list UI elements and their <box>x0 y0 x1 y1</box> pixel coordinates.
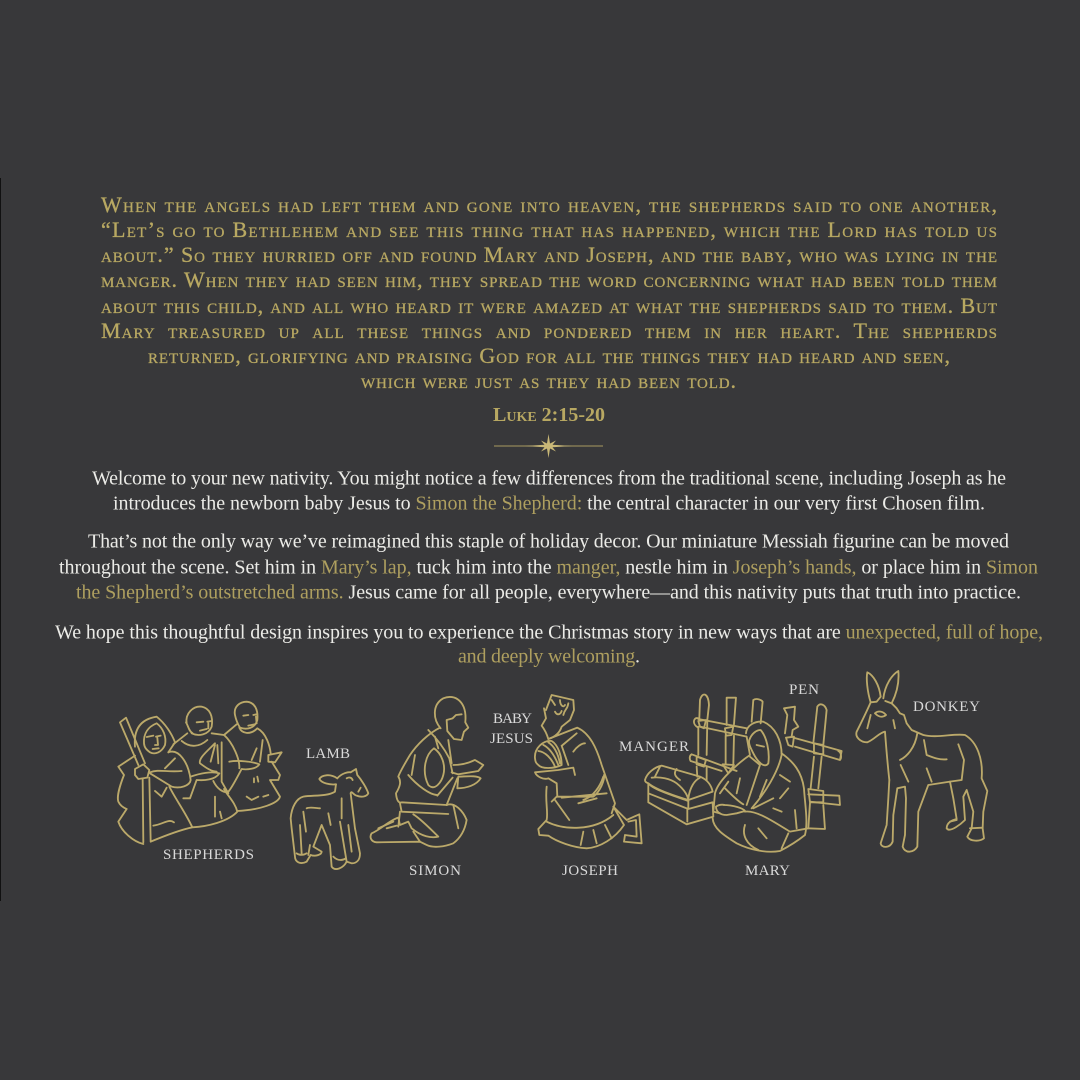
label: lamb: LAMB <box>306 746 350 762</box>
intro paragraph: Welcome to your new nativity. You might notice a few differences from the traditional scene, including Joseph as he <box>92 468 1006 490</box>
intro paragraph: introduces the newborn baby Jesus to Simon the Shepherd: the central character in our very first Chosen film. <box>113 492 985 514</box>
figurine paragraph: That’s not the only way we’ve reimagined this staple of holiday decor. Our miniature Messiah figurine can be moved <box>88 530 1009 552</box>
figure: Joseph <box>535 695 642 848</box>
scripture passage: which were just as they had been told. <box>361 368 736 393</box>
label: shepherds: SHEPHERDS <box>163 847 254 863</box>
figurine paragraph: throughout the scene. Set him in Mary’s lap, tuck him into the manger, nestle him in Joseph’s hands, or place him in Simon <box>59 556 1038 578</box>
label: simon: SIMON <box>409 863 461 879</box>
closing paragraph <box>55 622 1043 668</box>
scripture passage: manger. When they had seen him, they spread the word concerning what had been told them <box>101 267 997 292</box>
scripture passage: When the angels had left them and gone into heaven, the shepherds said to one another, <box>101 192 997 217</box>
label: donkey: DONKEY <box>913 699 980 715</box>
label: baby jesus: JESUS <box>490 731 533 747</box>
label: pen: PEN <box>789 682 819 698</box>
scripture passage <box>101 192 997 393</box>
figurine paragraph <box>59 530 1038 604</box>
figure: shepherds <box>118 702 282 844</box>
scripture passage: returned, glorifying and praising God for all the things they had heard and seen, <box>148 343 950 368</box>
intro paragraph <box>92 468 1006 514</box>
label: mary: MARY <box>745 863 790 879</box>
scripture reference: Luke 2:15-20 <box>493 404 605 426</box>
figure: Simon <box>371 697 483 847</box>
label: manger: MANGER <box>619 739 689 755</box>
star divider <box>494 434 603 458</box>
label: baby jesus <box>490 711 533 747</box>
scripture passage: “Let’s go to Bethlehem and see this thing that has happened, which the Lord has told us <box>101 217 997 242</box>
closing paragraph: and deeply welcoming. <box>458 646 640 668</box>
figure: Mary <box>713 722 808 852</box>
label: joseph: JOSEPH <box>562 863 618 879</box>
figure: pen <box>690 695 842 829</box>
figure: donkey <box>856 671 987 852</box>
scripture passage: about.” So they hurried off and found Mary and Joseph, and the baby, who was lying in the <box>101 242 997 267</box>
label: baby jesus: BABY <box>493 711 532 727</box>
closing paragraph: We hope this thoughtful design inspires you to experience the Christmas story in new ways that are unexpected, full of hope, <box>55 622 1043 644</box>
figure: manger <box>645 766 713 824</box>
scripture passage: about this child, and all who heard it were amazed at what the shepherds said to them. But <box>101 293 997 318</box>
figurine paragraph: the Shepherd’s outstretched arms. Jesus came for all people, everywhere—and this nativity puts that truth into practice. <box>76 582 1021 604</box>
scripture passage: Mary treasured up all these things and pondered them in her heart. The shepherds <box>101 318 997 343</box>
figure: lamb <box>291 769 368 869</box>
